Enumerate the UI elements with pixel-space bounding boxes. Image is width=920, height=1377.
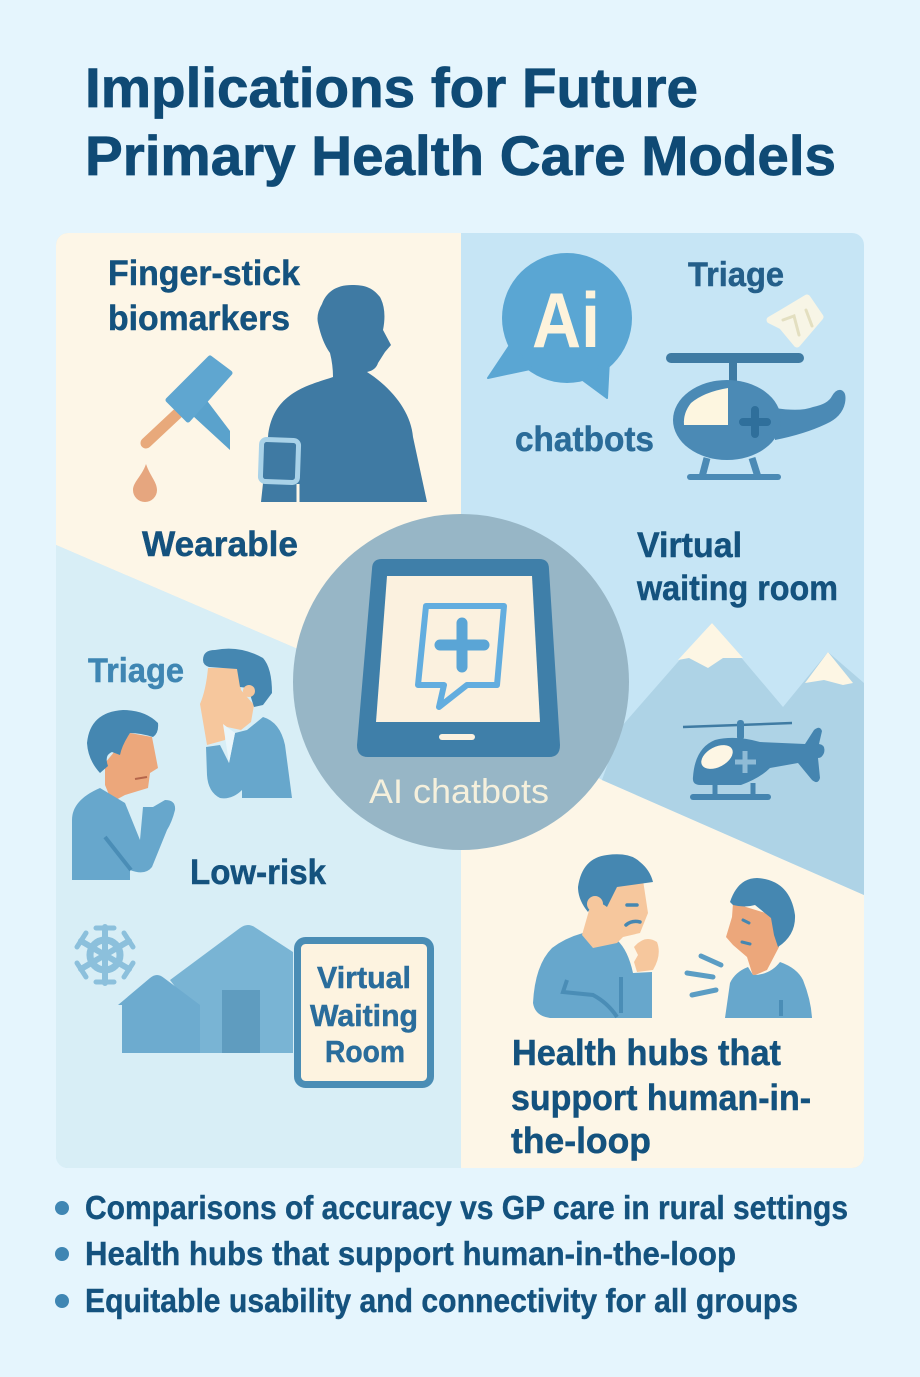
sign: Virtual Waiting Room: [298, 940, 430, 1084]
bullet 2: Health hubs that support human-in-the-loop: [85, 1235, 736, 1272]
label: Virtual waiting room: Virtual: [637, 526, 742, 565]
icon: speech lines: [687, 956, 721, 995]
icon: tablet: [357, 559, 560, 757]
icon: blood drop: [133, 464, 157, 502]
icon: paper note: [770, 298, 820, 344]
label: Virtual waiting room: waiting room: [636, 569, 838, 608]
label: Triage: Triage: [688, 256, 784, 294]
panel: finger-stick and wearable: [108, 254, 427, 564]
icon: lancet: [146, 358, 230, 450]
icon: clinician listening: [725, 878, 812, 1018]
icon: small helicopter: [683, 720, 824, 797]
icon: AI speech bubble: Ai: [532, 276, 600, 364]
mountains: [602, 623, 864, 895]
sign: Virtual Waiting Room: Virtual: [317, 960, 411, 995]
icon: patient coughing: [72, 710, 175, 880]
panel: health hubs: [511, 854, 812, 1161]
title: Primary Health Care Models: [85, 124, 836, 187]
sign: Virtual Waiting Room: Waiting: [310, 998, 418, 1033]
label: Health hubs: Health hubs that: [512, 1032, 781, 1073]
icon: man coughing: [533, 854, 659, 1018]
label: Triage: Triage: [88, 652, 184, 690]
title: [85, 56, 836, 187]
label: finger-stick biomarkers: biomarkers: [108, 299, 290, 338]
label: chatbots: chatbots: [515, 420, 654, 459]
icon: snowflake: [77, 927, 133, 983]
sign: Virtual Waiting Room: Room: [325, 1034, 405, 1069]
icon: helicopter: [671, 358, 846, 477]
icon: rural houses: [118, 925, 293, 1053]
label: Virtual waiting room: [636, 526, 838, 608]
panel: AI triage helicopter: [488, 253, 846, 797]
icon: AI speech bubble: [488, 253, 632, 398]
label: finger-stick biomarkers: Finger-stick: [108, 254, 301, 293]
icon: patient with hand on face: [200, 649, 292, 798]
label: Low-risk: Low-risk: [190, 853, 326, 892]
icon: medical chat bubble: [418, 606, 504, 707]
central circle: AI chatbots tablet: [293, 514, 629, 850]
bullet 1: Comparisons of accuracy vs GP care in rural settings: [85, 1189, 848, 1226]
label: Wearable: Wearable: [142, 525, 298, 564]
label: Health hubs: support human-in-: [511, 1077, 811, 1118]
label: finger-stick biomarkers: [108, 254, 301, 338]
bullet 3: Equitable usability and connectivity for all groups: [85, 1282, 798, 1319]
quadrant panels: [56, 233, 864, 1168]
title: Implications for Future: [85, 56, 698, 119]
label: Health hubs: the-loop: [511, 1120, 651, 1161]
bullet list: [55, 1189, 848, 1319]
label: AI chatbots: AI chatbots: [369, 773, 549, 811]
icon: person with wearable: [260, 285, 427, 502]
label: Health hubs: [511, 1032, 811, 1161]
panel: low-risk triage and waiting room: [72, 649, 430, 1084]
